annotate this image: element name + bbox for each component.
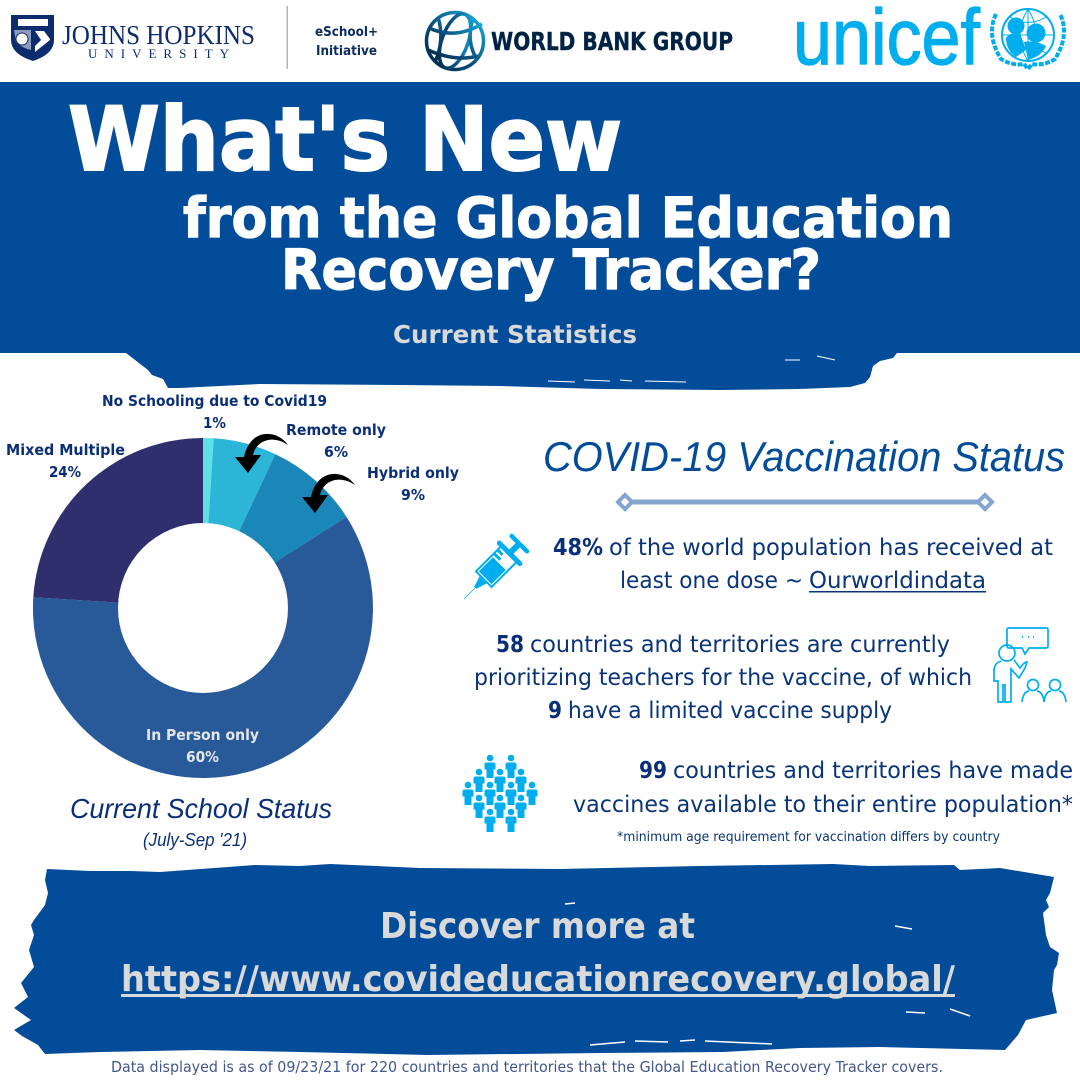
icon: university shield [11, 15, 54, 61]
chart caption: Current School Status [70, 793, 332, 824]
chart caption: (July-Sep '21) [143, 830, 247, 850]
panel: current school status donut chart [6, 392, 459, 850]
logo: UNICEF [793, 0, 1064, 81]
label: no schooling: 1% [203, 414, 226, 432]
stat: 99 countries: 99 [639, 758, 667, 784]
icon: world bank globe [426, 10, 484, 72]
stat: 48 percent: least one dose ~ [620, 568, 803, 594]
stat: 48 percent: 48% [553, 535, 603, 561]
logo sub-wordmark: UNIVERSITY [88, 46, 230, 61]
chart caption [70, 793, 332, 850]
text: eSchool+ Initiative: Initiative [316, 44, 377, 59]
stat: 58 countries: countries and territories are currently [530, 632, 950, 658]
icon: population group [462, 755, 538, 832]
icon: unicef emblem [992, 9, 1064, 69]
logo wordmark: JOHNS HOPKINS [62, 20, 255, 50]
title: Recovery Tracker? [281, 238, 821, 302]
stat: 58 countries [474, 632, 972, 724]
stat: 58 countries: prioritizing teachers for the vaccine, of which [474, 665, 972, 691]
stat: 58 countries: 58 [496, 632, 524, 658]
icon: teacher and students [994, 628, 1066, 702]
stat: 58 countries: have a limited vaccine supply [568, 698, 892, 724]
stat: 99 countries: countries and territories have made [673, 758, 1073, 784]
panel: title banner [0, 82, 1080, 390]
footnote: *minimum age requirement for vaccination differs by country [617, 830, 1000, 845]
banner brush shape [0, 82, 1080, 390]
label: remote only: Remote only [286, 421, 386, 439]
stat: 48 percent: of the world population has received at [609, 535, 1053, 561]
title: What's New [68, 88, 622, 191]
footer note: Data displayed is as of 09/23/21 for 220 countries and territories that the Global Education Recovery Tracker covers. [111, 1058, 943, 1076]
text: eSchool+ Initiative: eSchool+ [315, 25, 378, 40]
text: eSchool+ Initiative [315, 25, 378, 59]
label: no schooling [102, 392, 327, 432]
arrow: to remote slice [235, 434, 288, 473]
label: in person only [146, 726, 259, 766]
logo wordmark: WORLD BANK GROUP [491, 27, 733, 56]
brush background [14, 864, 1059, 1055]
panel: discover more call to action [14, 864, 1059, 1055]
stat: 99 countries [573, 758, 1073, 818]
stat: 99 countries: vaccines available to their entire population* [573, 792, 1073, 818]
label: mixed multiple: Mixed Multiple [6, 441, 125, 459]
label: hybrid only [367, 464, 459, 504]
stat: 48 percent: Ourworldindata [809, 568, 986, 594]
label: mixed multiple: 24% [49, 463, 81, 481]
label: hybrid only: Hybrid only [367, 464, 459, 482]
logo: World Bank Group [426, 10, 733, 72]
label: in person only: In Person only [146, 726, 259, 744]
subtitle: Current Statistics [393, 320, 637, 349]
stat: 48 percent [553, 535, 1053, 594]
arrow: to hybrid slice [302, 474, 355, 513]
divider with diamonds [618, 495, 992, 509]
icon: syringe [452, 530, 533, 611]
label: mixed multiple [6, 441, 125, 481]
link: https://www.covideducationrecovery.global/ [121, 959, 956, 1000]
label: hybrid only: 9% [401, 486, 425, 504]
logo: Johns Hopkins University [11, 15, 255, 61]
label: no schooling: No Schooling due to Covid19 [102, 392, 327, 410]
label: in person only: 60% [186, 748, 219, 766]
label: remote only [286, 421, 386, 461]
panel: covid-19 vaccination status [452, 433, 1073, 845]
heading: COVID-19 Vaccination Status [543, 433, 1065, 480]
title [68, 88, 953, 302]
title: from the Global Education [183, 186, 953, 250]
donut chart [33, 438, 373, 778]
label: remote only: 6% [324, 443, 348, 461]
text: discover more at: Discover more at [380, 906, 695, 947]
stat: 58 countries: 9 [548, 698, 562, 724]
